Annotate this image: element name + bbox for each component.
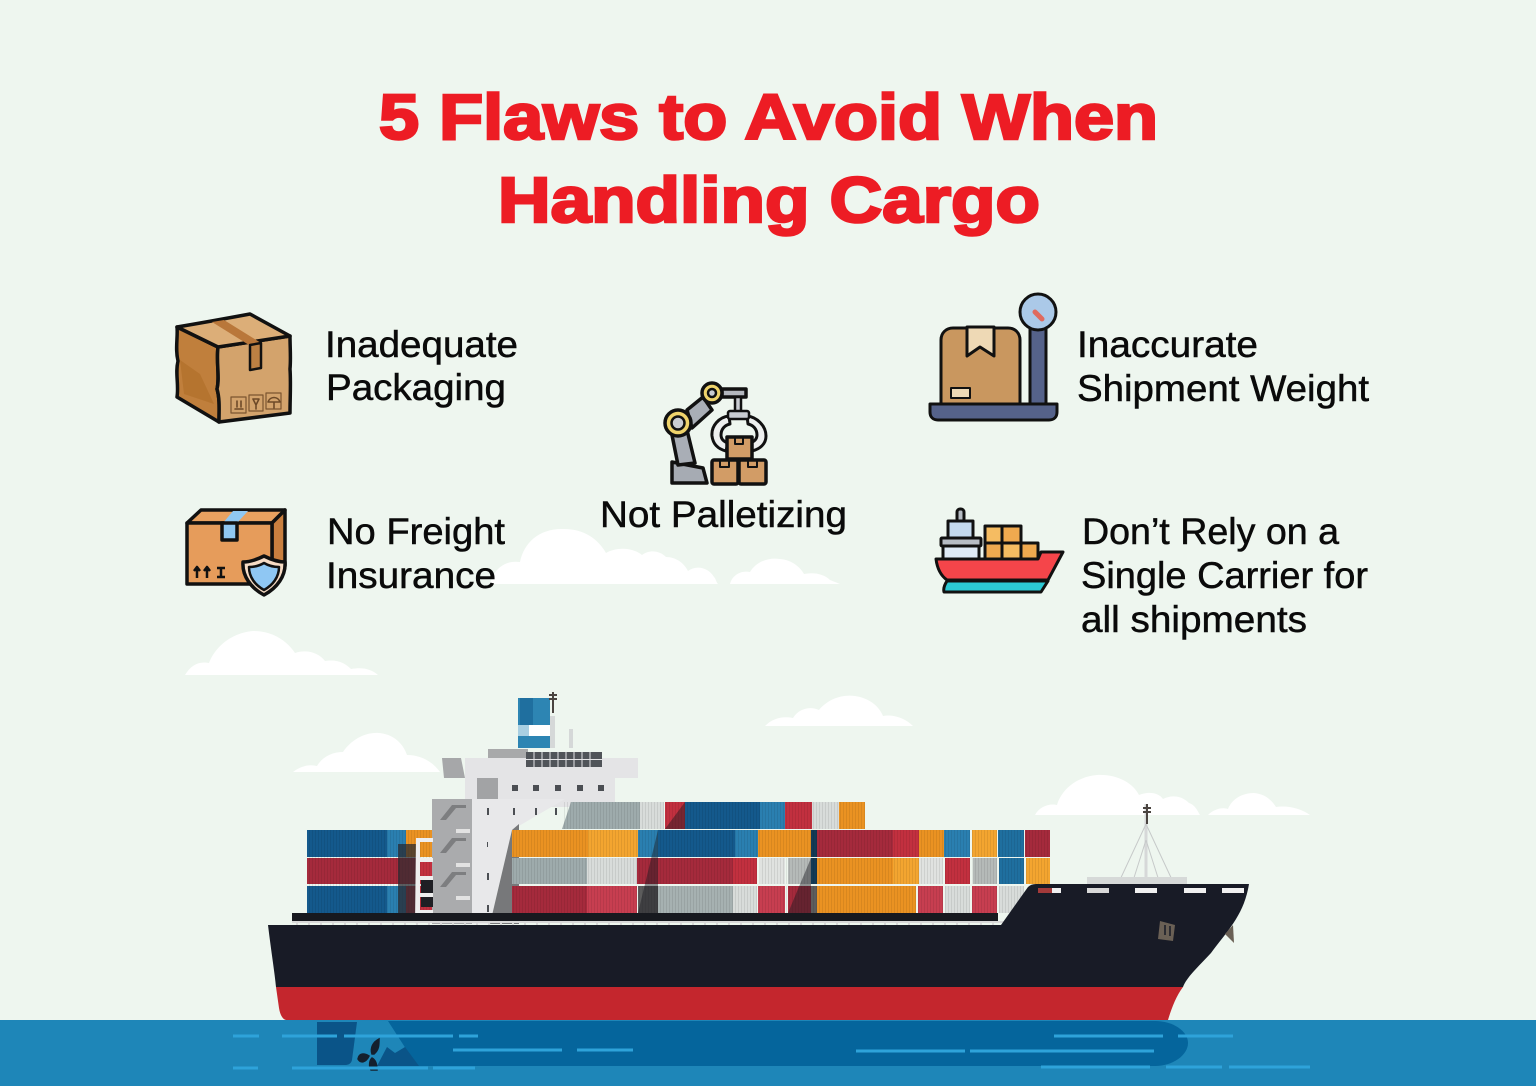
forward containers, bottom tier [512, 886, 1024, 913]
hull [268, 884, 1249, 987]
text: Inaccurate Shipment Weight: Inaccurate [1077, 324, 1258, 365]
text: Inaccurate Shipment Weight: Shipment Weight [1077, 368, 1370, 409]
sea [0, 1020, 1536, 1086]
text: Don't Rely on a Single Carrier for all shipments: all shipments [1081, 599, 1307, 640]
text: Don't Rely on a Single Carrier for all shipments [1081, 511, 1368, 640]
forward containers, top tier [562, 802, 865, 829]
text: No Freight Insurance: No Freight [327, 511, 506, 552]
deck base and rail [292, 913, 1004, 924]
title: 5 Flaws to Avoid When [379, 81, 1158, 153]
text: Don't Rely on a Single Carrier for all shipments: Single Carrier for [1081, 555, 1368, 596]
text: Not Palletizing: Not Palletizing [600, 494, 847, 535]
forward containers, third tier [512, 858, 1050, 884]
aft containers [307, 830, 433, 924]
container ship [268, 692, 1249, 1020]
title: Handling Cargo [498, 164, 1040, 236]
red waterline [276, 987, 1183, 1020]
forward containers, second tier [512, 830, 1050, 857]
ship reflection [388, 1021, 1188, 1066]
funnel [518, 692, 573, 748]
text: No Freight Insurance: Insurance [326, 555, 496, 596]
bow details [1038, 888, 1244, 943]
icon: insured box with shield [187, 510, 285, 595]
clouds [185, 529, 1310, 815]
text: Don't Rely on a Single Carrier for all shipments: Don’t Rely on a [1082, 511, 1339, 552]
water ripples [233, 1036, 1310, 1068]
icon: small cargo ship [936, 509, 1063, 592]
container shadows [638, 802, 811, 913]
icon: robot arm with boxes [665, 383, 766, 484]
icon: damaged cardboard box [177, 314, 290, 422]
icon: package on weighing scale [930, 294, 1057, 420]
text: Inadequate Packaging: Inadequate [325, 324, 518, 365]
rudder and propeller [317, 1022, 419, 1070]
text: No Freight Insurance [326, 511, 506, 596]
text: Inadequate Packaging [325, 324, 518, 408]
text: Inadequate Packaging: Packaging [326, 367, 506, 408]
superstructure [432, 749, 638, 924]
text: Inaccurate Shipment Weight [1077, 324, 1370, 409]
title [379, 81, 1158, 236]
bow mast [1087, 804, 1187, 886]
